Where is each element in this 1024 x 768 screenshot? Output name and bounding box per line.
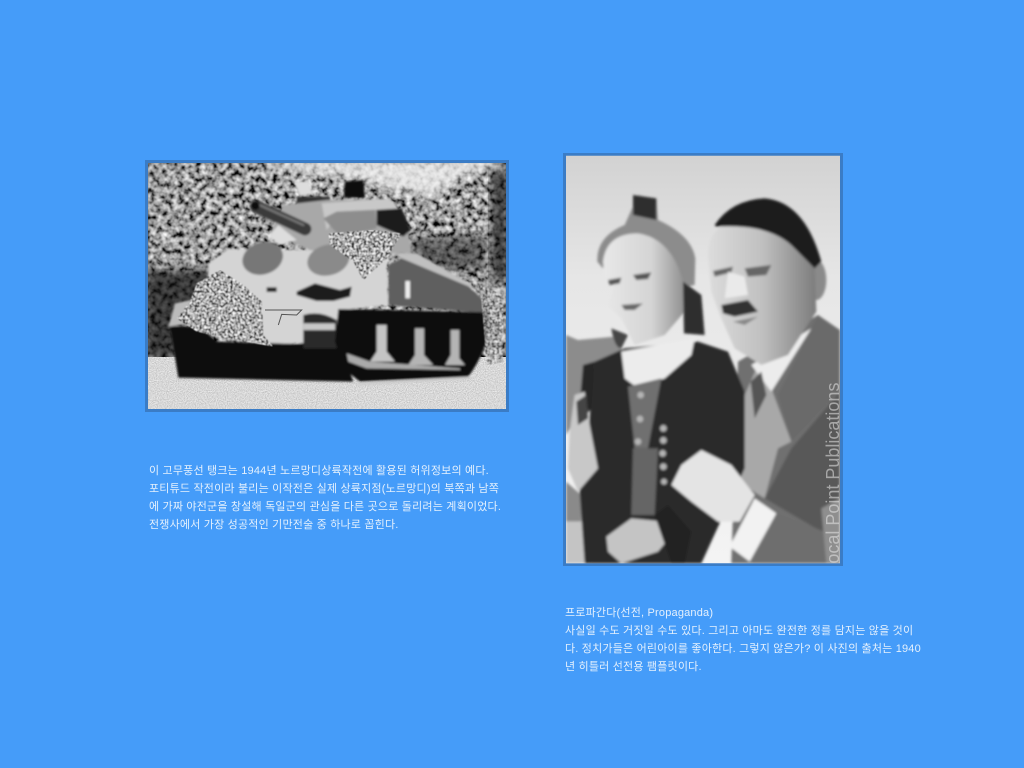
- man's head: [806, 260, 826, 300]
- suit: [731, 315, 840, 563]
- caption: propaganda description: [565, 606, 921, 673]
- photo: Hitler holding a young girl: [563, 153, 843, 566]
- caption: propaganda description: 다. 정치가들은 어린아이를 좋아한다. 그렇지 않은가? 이 사진의 출처는 1940: [565, 643, 921, 655]
- hands: [568, 392, 598, 492]
- photo watermark: ocal Point Publications: [823, 383, 843, 564]
- caption: inflatable tank description: 포티튜드 작전이라 불리는 이작전은 실제 상륙지점(노르망디)의 북쪽과 남쪽: [149, 483, 499, 495]
- caption: inflatable tank description: [149, 464, 501, 531]
- caption: inflatable tank description: 전쟁사에서 가장 성공적인 기만전술 중 하나로 꼽힌다.: [149, 519, 399, 531]
- caption: propaganda description: 프로파간다(선전, Propaganda): [565, 607, 713, 619]
- girl's dress: [580, 342, 745, 563]
- caption: inflatable tank description: 에 가짜 야전군을 창설해 독일군의 관심을 다른 곳으로 돌리려는 계획이었다.: [149, 501, 501, 513]
- caption: propaganda description: 년 히틀러 선전용 팸플릿이다.: [565, 661, 702, 673]
- caption: propaganda description: 사실일 수도 거짓일 수도 있다. 그리고 아마도 완전한 정를 담지는 않을 것이: [565, 625, 913, 637]
- caption: inflatable tank description: 이 고무풍선 탱크는 1944년 노르망디상륙작전에 활용된 허위정보의 예다.: [149, 465, 489, 477]
- girl's buttons: [635, 392, 667, 485]
- photo: inflatable rubber tank: [145, 160, 509, 412]
- girl's head: [611, 328, 628, 348]
